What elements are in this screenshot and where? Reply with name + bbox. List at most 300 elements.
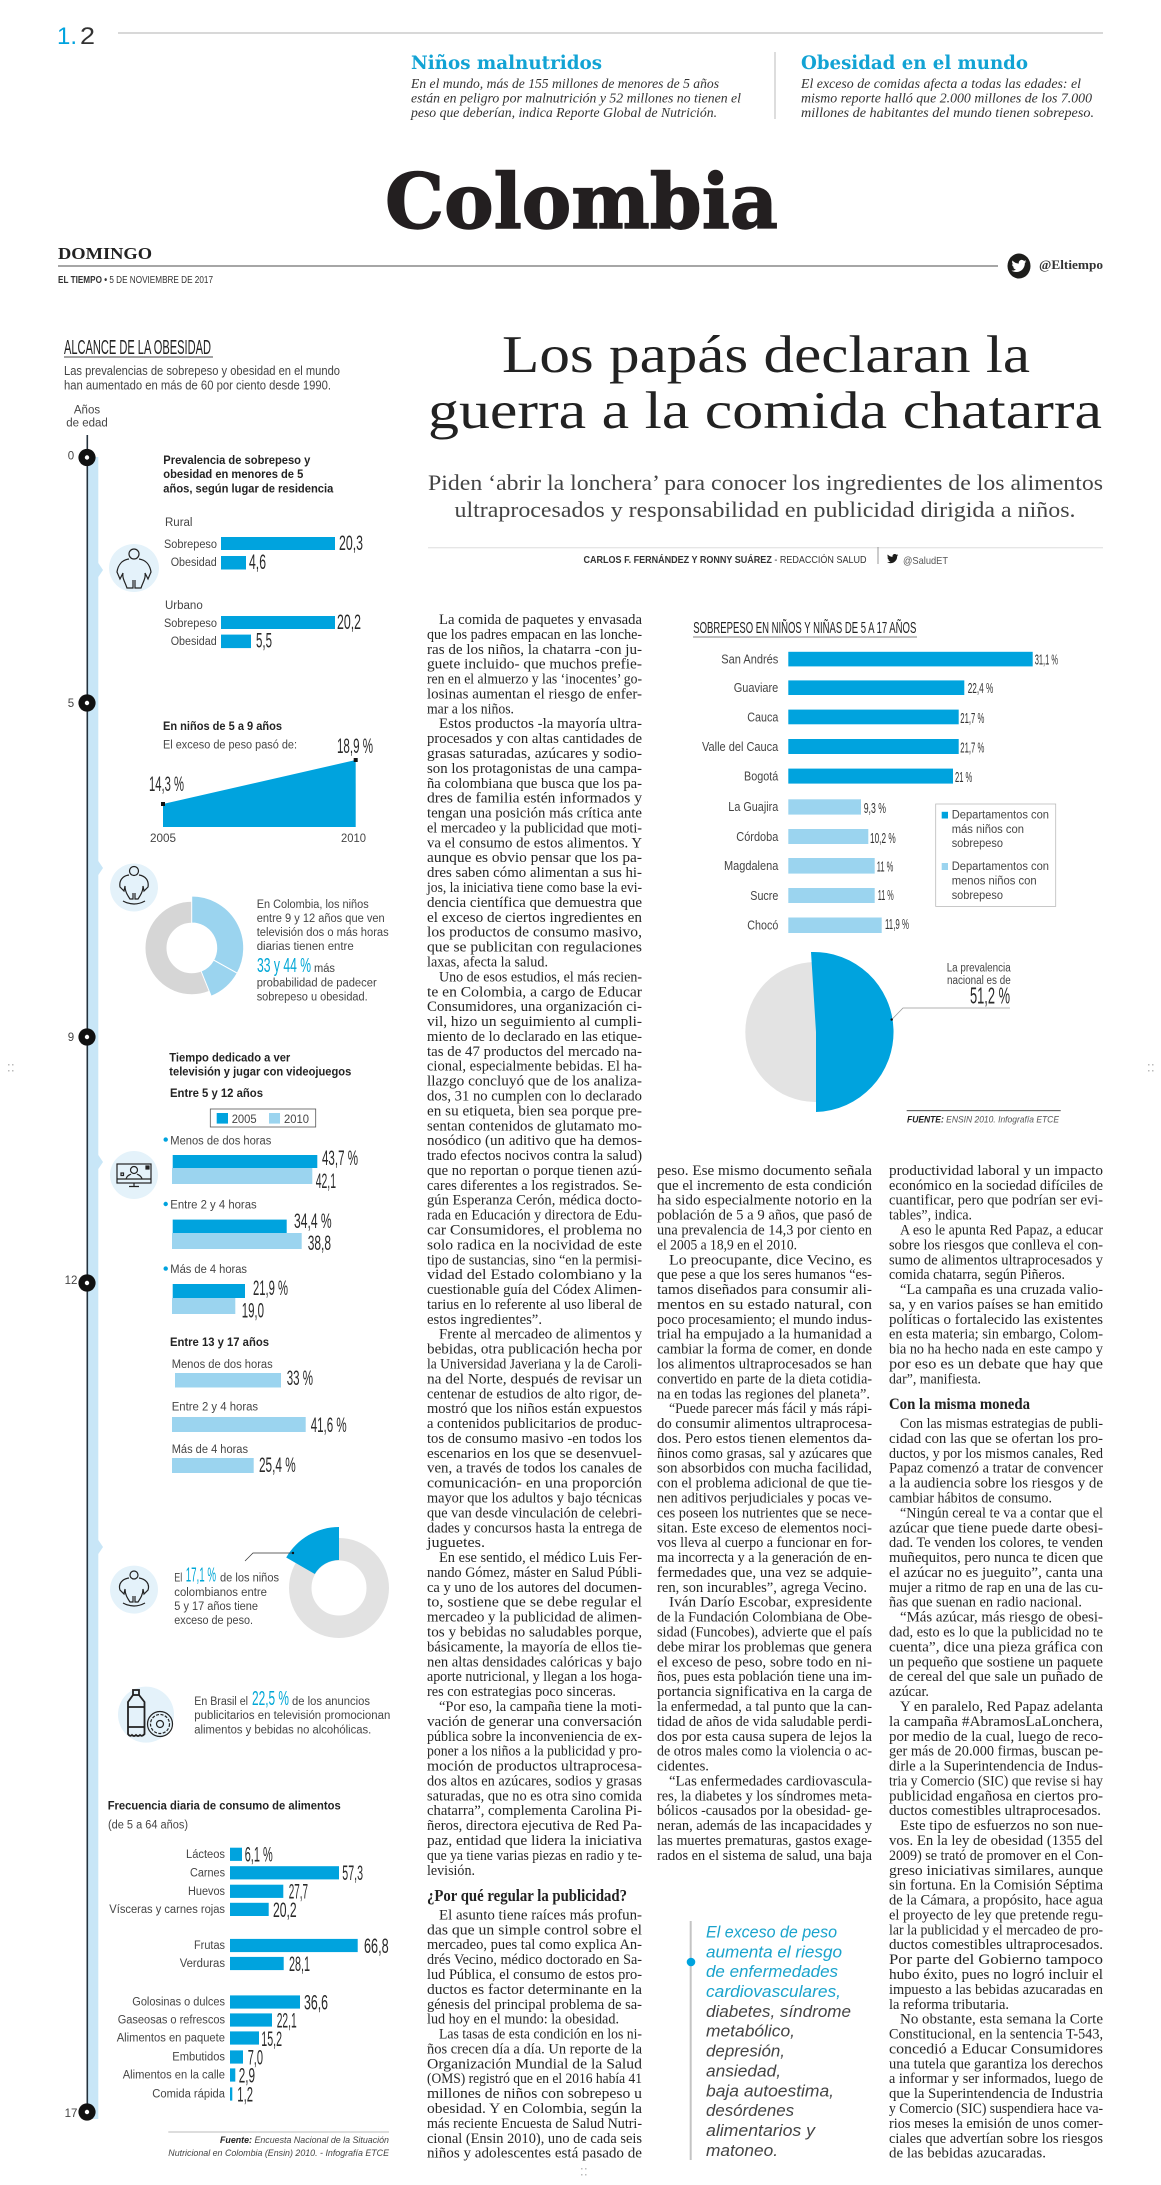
paragraph: Iván Darío Escobar: ños, pues esta población tiene una im- bbox=[657, 1669, 872, 1685]
paragraph: Luis Fernando Gómez: nando Gómez, máster en Salud Públi- bbox=[427, 1565, 642, 1581]
paragraph: estudio Educar Consumidores: te en Colombia, a cargo de Educar bbox=[427, 984, 642, 1000]
callout: exceso de peso: metabólico, bbox=[706, 2022, 795, 2041]
paragraph: Corte Constitucional: una tutela que garantiza los derechos bbox=[889, 2056, 1103, 2072]
paragraph: Carolina Piñeros: vación de generar una conversación bbox=[427, 1714, 642, 1730]
paragraph: Corte Constitucional: ciales que advertían sobre los riesgos bbox=[889, 2131, 1103, 2147]
legend: departamentos: sobrepeso bbox=[952, 890, 1003, 902]
paragraph: AbramosLaLonchera bbox=[889, 1699, 1103, 1819]
paragraph: puede parecer: con el problema adicional de que tie- bbox=[657, 1476, 872, 1492]
paragraph: más azúcar: “Más azúcar, más riesgo de obesi- bbox=[900, 1610, 1103, 1626]
paragraph: puede parecer bbox=[657, 1401, 872, 1596]
deck: Piden ‘abrir la lonchera’ para conocer los ingredientes de los alimentos bbox=[428, 470, 1103, 495]
paragraph: Luis Fernando Gómez bbox=[427, 1550, 642, 1700]
paragraph: Carolina Piñeros bbox=[427, 1699, 642, 1879]
chart: tiempo dedicado a televisión y videojuegos: 33 % bbox=[287, 1367, 313, 1390]
chart: tiempo dedicado a televisión y videojuegos: Entre 5 y 12 años bbox=[170, 1088, 263, 1100]
paragraph: enfermedades cardiovasculares: bólicos -causados por la obesidad- ge- bbox=[657, 1803, 872, 1819]
paragraph: ley de obesidad: impuesto a las bebidas azucaradas en bbox=[889, 1982, 1103, 1998]
paragraph: Iván Darío Escobar: de la Fundación Colombiana de Obe- bbox=[657, 1610, 872, 1626]
paragraph: estudio Educar Consumidores: tas de 47 productos del mercado na- bbox=[427, 1044, 642, 1060]
chart: frecuencia diaria de consumo: 22,1 bbox=[277, 2010, 297, 2032]
bar chart: departamentos: Chocó bbox=[747, 918, 778, 932]
paragraph: ningún cereal: azúcar que tiene puede darte obesi- bbox=[889, 1520, 1103, 1536]
chart: area exceso de peso 5 a 9 años bbox=[149, 721, 373, 845]
paragraph: AbramosLaLonchera: la campaña #AbramosLaLonchera, bbox=[889, 1714, 1103, 1730]
paragraph: frente al mercadeo: la Universidad Javeriana y la de Caroli- bbox=[427, 1356, 642, 1372]
paragraph: intro: ras de los niños, la chatarra -con ju- bbox=[427, 642, 642, 658]
chart: frecuencia diaria de consumo: 36,6 bbox=[304, 1992, 328, 2014]
chart: prevalencia por lugar de residencia: Sobrepeso bbox=[164, 539, 217, 551]
paragraph: estudio Educar Consumidores bbox=[427, 969, 642, 1328]
paragraph: mismas estrategias: ductos, y por los mismos canales, Red bbox=[889, 1446, 1103, 1462]
paragraph: Iván Darío Escobar: sidad (Funcobes), advierte que el país bbox=[657, 1624, 872, 1640]
paragraph: cruzada valiosa bbox=[889, 1282, 1103, 1387]
text: Brasil 22,5 %: 22,5 % bbox=[252, 1688, 289, 1710]
bar chart: departamentos: 10,2 % bbox=[870, 830, 896, 847]
paragraph: estos productos: laxas, afecta la salud. bbox=[427, 954, 548, 970]
paragraph: ley de obesidad: lar la publicidad y el mercadeo de pro- bbox=[889, 1922, 1103, 1938]
paragraph: estudio Educar Consumidores: cares diferentes a los registrados. Se- bbox=[427, 1178, 642, 1194]
paragraph: ley de obesidad: greso iniciativas similares, aunque bbox=[889, 1863, 1103, 1879]
paragraph: cruzada valiosa: por eso es un debate que hay que bbox=[889, 1356, 1103, 1372]
paragraph: ley de obesidad: hubo éxito, pues no logró incluir el bbox=[889, 1967, 1103, 1983]
paragraph: puede parecer: nen aditivos perjudiciales y pocas ve- bbox=[657, 1490, 872, 1506]
chart: frecuencia diaria de consumo: Comida rápida bbox=[152, 2089, 226, 2101]
paragraph: frente al mercadeo: Frente al mercadeo de alimentos y bbox=[439, 1327, 642, 1343]
callout: exceso de peso: aumenta el riesgo bbox=[706, 1942, 842, 1961]
source: infografía: Fuente: Encuesta Nacional de la Situación bbox=[220, 2135, 389, 2145]
text: niños que ven televisión: 33 y 44 % bbox=[257, 955, 311, 977]
paragraph: productividad bbox=[889, 1163, 1103, 1224]
chart: pie prevalencia nacional bbox=[745, 952, 1010, 1112]
byline bbox=[584, 547, 949, 567]
paragraph: mismas estrategias: Papaz comenzó a tratar de convencer bbox=[889, 1461, 1103, 1477]
chart: frecuencia diaria de consumo: 6,1 % bbox=[245, 1844, 273, 1866]
paragraph: mismas estrategias: Con las mismas estrategias de publi- bbox=[900, 1416, 1103, 1432]
bar chart: departamentos: Valle del Cauca bbox=[702, 740, 778, 754]
callout: exceso de peso: depresión, bbox=[706, 2042, 785, 2061]
chart: area exceso de peso 5 a 9 años: 2005 bbox=[150, 833, 176, 845]
paragraph: AbramosLaLonchera: por medio de la cual, luego de reco- bbox=[889, 1729, 1103, 1745]
chart: prevalencia por lugar de residencia: 20,2 bbox=[337, 611, 361, 634]
paragraph: estos productos bbox=[426, 716, 643, 970]
text: niños que ven televisión bbox=[257, 899, 389, 1004]
subheading: por qué regular: ¿Por qué regular la publicidad? bbox=[427, 1886, 627, 1905]
paragraph: Luis Fernando Gómez: aporte nutricional, y llegan a los hoga- bbox=[427, 1669, 642, 1685]
paragraph: lo preocupante bbox=[657, 1252, 873, 1402]
paragraph: tasas: ños crecen día a día. Un reporte de la bbox=[427, 2041, 642, 2057]
callout: exceso de peso: de enfermedades bbox=[706, 1962, 838, 1981]
chart: tiempo dedicado a televisión y videojuegos: 41,6 % bbox=[311, 1414, 347, 1437]
byline: @SaludET bbox=[903, 555, 949, 567]
paragraph: estudio Educar Consumidores: llazgo concluyó que de los analiza- bbox=[427, 1074, 642, 1090]
paragraph: ningún cereal: ñas que suenan en radio nacional. bbox=[889, 1595, 1082, 1611]
paragraph: frente al mercadeo: dades y concursos hasta la entrega de bbox=[427, 1520, 642, 1536]
dateline: EL TIEMPO • 5 DE NOVIEMBRE DE 2017 bbox=[58, 275, 213, 286]
chart: prevalencia por lugar de residencia: Prevalencia de sobrepeso y bbox=[163, 455, 311, 467]
paragraph: Red Papaz: sobre los riesgos que conlleva el con- bbox=[889, 1237, 1103, 1253]
teaser: Niños malnutridos: están en peligro por malnutrición y 52 millones no tienen el bbox=[411, 90, 741, 106]
paragraph: tasas: más reciente Encuesta de Salud Nutri- bbox=[427, 2116, 642, 2132]
chart: frecuencia diaria de consumo: 20,2 bbox=[273, 1899, 297, 1922]
headline: guerra a la comida chatarra bbox=[428, 382, 1102, 440]
text: niños que ven televisión: más bbox=[314, 963, 335, 975]
chart: frecuencia diaria de consumo: 66,8 bbox=[364, 1935, 389, 1958]
legend: departamentos bbox=[936, 804, 1056, 906]
chart: frecuencia diaria de consumo: Embutidos bbox=[172, 2052, 225, 2064]
text: prevalencia nacional: nacional es de bbox=[947, 975, 1011, 987]
paragraph: más azúcar bbox=[889, 1610, 1104, 1700]
chart: area exceso de peso 5 a 9 años: En niños de 5 a 9 años bbox=[163, 721, 282, 733]
paragraph: Carolina Piñeros: ñeros, directora ejecutiva de Red Pa- bbox=[427, 1818, 642, 1834]
chart: frecuencia diaria de consumo: 15,2 bbox=[261, 2028, 282, 2051]
paragraph: lo preocupante: trial ha empujado a la humanidad a bbox=[657, 1327, 872, 1343]
paragraph: más azúcar: de cereal del que sale un puñado de bbox=[889, 1669, 1103, 1685]
bar chart: departamentos: La Guajira bbox=[728, 800, 778, 814]
text: Brasil 22,5 % bbox=[194, 1688, 390, 1737]
paragraph: Andrés Vecino: das que un simple control sobre el bbox=[427, 1922, 642, 1938]
text: niños que ven televisión: probabilidad de padecer bbox=[257, 977, 377, 989]
twitter handle: @Eltiempo bbox=[1039, 257, 1103, 272]
timeline: 0 bbox=[68, 450, 74, 462]
paragraph: Luis Fernando Gómez: básicamente, la mayoría de ellos tie- bbox=[427, 1639, 642, 1655]
paragraph: enfermedades cardiovasculares: res, la diabetes y los síndromes meta- bbox=[657, 1788, 872, 1804]
icon: bottle and doughnut bbox=[118, 1687, 174, 1743]
paragraph: Carolina Piñeros: pública sobre la inconveniencia de ex- bbox=[427, 1729, 642, 1745]
chart: area exceso de peso 5 a 9 años: El exceso de peso pasó de: bbox=[163, 740, 297, 752]
paragraph: Carolina Piñeros: que ya tiene varias piezas en radio y te- bbox=[427, 1848, 642, 1864]
article column 2 bbox=[657, 1163, 873, 1864]
page number: 1. bbox=[57, 23, 77, 50]
paragraph: Iván Darío Escobar: la enfermedad, a tal punto que la can- bbox=[657, 1699, 872, 1715]
panel intro bbox=[64, 364, 340, 393]
chart: frecuencia diaria de consumo: Lácteos bbox=[186, 1849, 225, 1861]
bar chart: departamentos: 11 % bbox=[878, 887, 894, 904]
paragraph: Luis Fernando Gómez: En ese sentido, el médico Luis Fer- bbox=[439, 1550, 642, 1566]
callout: exceso de peso: cardiovasculares, bbox=[706, 1982, 841, 2001]
paragraph: cruzada valiosa: bia no ha hecho nada en este campo y bbox=[889, 1342, 1103, 1358]
paragraph: AbramosLaLonchera: tria y Comercio (SIC) que revise si hay bbox=[889, 1773, 1103, 1789]
paragraph: Corte Constitucional: a informar y ser informados, luego de bbox=[889, 2071, 1103, 2087]
paragraph: estos productos: procesados y con altas cantidades de bbox=[427, 731, 642, 747]
paragraph: tasas: Organización Mundial de la Salud bbox=[427, 2056, 643, 2072]
paragraph: Andrés Vecino: lud hoy en el mundo: la obesidad. bbox=[427, 2012, 619, 2028]
chart: prevalencia por lugar de residencia: Rural bbox=[165, 517, 192, 529]
paragraph: estos productos: dres saben cómo alimentan a sus hi- bbox=[427, 865, 642, 881]
paragraph: tasas: cional (Ensin 2010), uno de cada seis bbox=[427, 2131, 642, 2147]
chart: frecuencia diaria de consumo bbox=[108, 1801, 389, 2106]
deck: ultraprocesados y responsabilidad en publicidad dirigida a niños. bbox=[454, 497, 1076, 522]
paragraph: estudio Educar Consumidores: nosódico (un aditivo que ha demos- bbox=[427, 1133, 642, 1149]
chart: tiempo dedicado a televisión y videojuegos: 42,1 bbox=[316, 1170, 336, 1193]
paragraph: puede parecer: ñinos como grasas, sal y azúcares que bbox=[657, 1446, 872, 1462]
paragraph: puede parecer: fermedades que, una vez se adquie- bbox=[657, 1565, 872, 1581]
paragraph: tasas: millones de niños con sobrepeso u bbox=[427, 2086, 643, 2102]
paragraph: AbramosLaLonchera: dirle a la Superintendencia de Indus- bbox=[889, 1758, 1103, 1774]
icon: child with excess weight bbox=[109, 544, 159, 592]
paragraph: intro bbox=[427, 612, 642, 717]
paragraph: Andrés Vecino: mercadeo, pues tal como explica An- bbox=[427, 1937, 642, 1953]
paragraph: frente al mercadeo: na del Norte, después de revisar un bbox=[427, 1371, 642, 1387]
chart: tiempo dedicado a televisión y videojuegos: Más de 4 horas bbox=[172, 1444, 248, 1456]
panel: sobrepeso por departamento bbox=[693, 617, 1061, 1126]
paragraph: Corte Constitucional: concedió a Educar Consumidores bbox=[889, 2041, 1103, 2057]
paragraph: lo preocupante: los alimentos ultraprocesados se han bbox=[657, 1356, 872, 1372]
chart: tiempo dedicado a televisión y videojuegos: 43,7 % bbox=[322, 1147, 358, 1170]
paragraph: frente al mercadeo: a contenidos publicitarios de produc- bbox=[427, 1416, 642, 1432]
paragraph: intro: guete incluido- que muchos prefie- bbox=[427, 657, 642, 673]
text: prevalencia nacional: La prevalencia bbox=[947, 962, 1011, 974]
chart: prevalencia por lugar de residencia: años, según lugar de residencia bbox=[163, 484, 334, 496]
paragraph: Corte Constitucional bbox=[889, 2012, 1103, 2162]
paragraph: Carolina Piñeros: levisión. bbox=[427, 1863, 475, 1879]
paragraph: estudio Educar Consumidores: miento de lo declarado en las etique- bbox=[427, 1029, 642, 1045]
text: niños que ven televisión: televisión dos o más horas bbox=[257, 927, 389, 939]
paragraph: AbramosLaLonchera: ductos comestibles ultraprocesados. bbox=[889, 1803, 1101, 1819]
paragraph: estos productos: los productos de consumo masivo, bbox=[427, 925, 642, 941]
paragraph: más azúcar: azúcar. bbox=[889, 1684, 929, 1700]
paragraph: Luis Fernando Gómez: to, sostiene que se debe regular el bbox=[427, 1595, 642, 1611]
paragraph: puede parecer: dos. Pero estos tienen elementos da- bbox=[657, 1431, 872, 1447]
paragraph: ley de obesidad: la reforma tributaria. bbox=[889, 1997, 1009, 2013]
paragraph: Corte Constitucional: de las bebidas azucaradas. bbox=[889, 2146, 1046, 2162]
paragraph: Carolina Piñeros: dos altos en azúcares, sodios y grasas bbox=[427, 1773, 642, 1789]
masthead: Colombia: Colombia bbox=[385, 157, 778, 246]
paragraph: Carolina Piñeros: poner a los niños a la publicidad y pro- bbox=[427, 1744, 642, 1760]
chart: frecuencia diaria de consumo: 27,7 bbox=[289, 1880, 308, 1904]
paragraph: enfermedades cardiovasculares: neran, además de las incapacidades y bbox=[657, 1818, 872, 1834]
paragraph: frente al mercadeo: centenar de estudios de alto rigor, de- bbox=[427, 1386, 642, 1402]
paragraph: enfermedades cardiovasculares: “Las enfermedades cardiovascula- bbox=[669, 1773, 872, 1789]
panel: sobrepeso por departamento: 31,1 % bbox=[1035, 651, 1058, 668]
paragraph: Carolina Piñeros: saturadas, que no es otra sino comida bbox=[427, 1788, 642, 1804]
paragraph: frente al mercadeo: que van desde vinculación de celebri- bbox=[427, 1505, 642, 1521]
bar chart: departamentos: Cauca bbox=[747, 710, 778, 724]
paragraph: Iván Darío Escobar: de otros males como la violencia o ac- bbox=[657, 1744, 872, 1760]
chart: frecuencia diaria de consumo: Frecuencia diaria de consumo de alimentos bbox=[108, 1801, 341, 1813]
chart: prevalencia por lugar de residencia: Sobrepeso bbox=[164, 618, 217, 630]
chart: prevalencia por lugar de residencia: obesidad en menores de 5 bbox=[163, 469, 304, 481]
paragraph: ningún cereal: mujer a ritmo de rap en una de las cu- bbox=[889, 1580, 1103, 1596]
teaser: Niños malnutridos: Niños malnutridos bbox=[411, 52, 602, 74]
paragraph: productividad: productividad laboral y un impacto bbox=[889, 1163, 1103, 1179]
chart: tiempo dedicado a televisión y videojuegos: 38,8 bbox=[308, 1232, 331, 1255]
paragraph: intro: losinas aumentan el riesgo de enfer- bbox=[427, 686, 642, 702]
paragraph: Red Papaz bbox=[889, 1222, 1103, 1283]
paragraph: más azúcar: un pequeño que sostiene un paquete bbox=[889, 1654, 1103, 1670]
timeline: 5 bbox=[68, 698, 74, 710]
paragraph: estos productos: jos, la iniciativa tiene como base la evi- bbox=[426, 880, 642, 896]
timeline: 9 bbox=[68, 1032, 74, 1044]
legend: departamentos: más niños con bbox=[952, 824, 1024, 836]
chart: frecuencia diaria de consumo: (de 5 a 64 años) bbox=[108, 1820, 188, 1832]
bar chart: departamentos: 21 % bbox=[955, 769, 972, 786]
chart: frecuencia diaria de consumo: Huevos bbox=[188, 1886, 225, 1898]
chart: tiempo dedicado a televisión y videojuegos: Más de 4 horas bbox=[170, 1264, 247, 1276]
paragraph: ese mismo documento bbox=[657, 1163, 872, 1253]
paragraph: lo preocupante: Lo preocupante, dice Vecino, es bbox=[669, 1252, 872, 1268]
callout: exceso de peso: diabetes, síndrome bbox=[706, 2002, 851, 2021]
paragraph: Andrés Vecino: El asunto tiene raíces más profun- bbox=[439, 1907, 642, 1923]
page number: 2 bbox=[80, 23, 95, 50]
bar chart: departamentos bbox=[702, 651, 1058, 933]
paragraph: AbramosLaLonchera: ger más de 20.000 firmas, buscan pe- bbox=[889, 1744, 1103, 1760]
paragraph: Andrés Vecino: drés Vecino, médico doctorado en Sa- bbox=[427, 1952, 642, 1968]
paragraph: ningún cereal: “Ningún cereal te va a contar que el bbox=[900, 1505, 1103, 1521]
teaser: Niños malnutridos bbox=[410, 52, 741, 120]
paragraph: puede parecer: ren, son incurables”, agrega Vecino. bbox=[657, 1580, 867, 1596]
paragraph: frente al mercadeo: mostró que los niños están expuestos bbox=[427, 1401, 642, 1417]
chart: donut televisión 33 y 44 % bbox=[156, 896, 244, 996]
chart: tiempo dedicado a televisión y videojuegos: Entre 2 y 4 horas bbox=[172, 1402, 258, 1414]
paragraph: estudio Educar Consumidores: vil, hizo un seguimiento al cumpli- bbox=[427, 1014, 642, 1030]
callout: exceso de peso: alimentarios y bbox=[706, 2121, 817, 2140]
text: 17,1 % de los niños: El bbox=[174, 1573, 182, 1585]
paragraph: frente al mercadeo: mayor que los adultos y bajo técnicas bbox=[427, 1490, 642, 1506]
teaser: Obesidad en el mundo: El exceso de comidas afecta a todas las edades: el bbox=[800, 76, 1081, 91]
legend: departamentos: Departamentos con bbox=[952, 861, 1049, 873]
paragraph: ese mismo documento: el 2005 a 18,9 en el 2010. bbox=[657, 1237, 797, 1253]
bar chart: departamentos: 22,4 % bbox=[968, 680, 993, 697]
paragraph: cruzada valiosa: políticas o fortalecido las existentes bbox=[889, 1312, 1103, 1328]
paragraph: frente al mercadeo bbox=[426, 1327, 643, 1551]
chart: tiempo dedicado a televisión y videojuegos: Entre 2 y 4 horas bbox=[170, 1200, 257, 1212]
text: Brasil 22,5 %: publicitarios en televisión promocionan bbox=[194, 1710, 390, 1722]
paragraph: Corte Constitucional: que la Superintendencia de Industria bbox=[889, 2086, 1103, 2102]
chart: tiempo dedicado a televisión y videojuegos: Tiempo dedicado a ver bbox=[169, 1052, 291, 1064]
callout: exceso de peso: El exceso de peso bbox=[706, 1922, 837, 1942]
paragraph: ley de obesidad: 2009) se trató de promover en el Con- bbox=[889, 1848, 1103, 1864]
page number bbox=[57, 23, 95, 50]
chart: tiempo dedicado a televisión y videojuegos: Entre 13 y 17 años bbox=[170, 1337, 269, 1349]
paragraph: mismas estrategias: cidad con las que se ofertan los pro- bbox=[889, 1431, 1103, 1447]
paragraph: Luis Fernando Gómez: res con estrategias poco sinceras. bbox=[427, 1684, 616, 1700]
chart: frecuencia diaria de consumo: Carnes bbox=[190, 1867, 225, 1879]
paragraph: frente al mercadeo: bebidas, otra publicación hecha por bbox=[427, 1342, 642, 1358]
paragraph: Iván Darío Escobar: dos por esta causa supera de lejos la bbox=[657, 1729, 872, 1745]
paragraph: estudio Educar Consumidores: sentan contenidos de glutamato mo- bbox=[427, 1118, 642, 1134]
paragraph: ningún cereal bbox=[889, 1505, 1103, 1611]
bar chart: departamentos: 9,3 % bbox=[864, 800, 886, 817]
text: niños que ven televisión: En Colombia, los niños bbox=[257, 899, 369, 911]
byline: CARLOS F. FERNÁNDEZ Y RONNY SUÁREZ - REDACCIÓN SALUD bbox=[584, 553, 867, 566]
chart: frecuencia diaria de consumo: Alimentos en la calle bbox=[123, 2070, 225, 2082]
paragraph: tasas: Las tasas de esta condición en los ni- bbox=[439, 2027, 642, 2043]
chart: frecuencia diaria de consumo: Golosinas o dulces bbox=[132, 1997, 225, 2009]
chart: area exceso de peso 5 a 9 años: 18,9 % bbox=[337, 735, 373, 758]
paragraph: frente al mercadeo: comunicación- en una proporción bbox=[427, 1476, 643, 1492]
bar chart: departamentos: 21,7 % bbox=[960, 710, 984, 727]
callout: exceso de peso: baja autoestima, bbox=[706, 2081, 834, 2100]
paragraph: Luis Fernando Gómez: ca y uno de los autores del documen- bbox=[427, 1580, 642, 1596]
paragraph: ley de obesidad: el proyecto de ley que pretende regu- bbox=[889, 1907, 1103, 1923]
paragraph: Corte Constitucional: y Comercio (SIC) suspendiera hace va- bbox=[889, 2101, 1103, 2117]
paragraph: más azúcar: cuenta”, dice una pieza gráfica con bbox=[889, 1639, 1104, 1655]
paragraph: estudio Educar Consumidores: estos ingredientes”. bbox=[427, 1312, 542, 1328]
paragraph: frente al mercadeo: tos de consumo masivo -en todos los bbox=[427, 1431, 642, 1447]
paragraph: estos productos: va el consumo de estos alimentos. Y bbox=[427, 835, 642, 851]
chart: tiempo dedicado a televisión y videojuegos: 25,4 % bbox=[259, 1454, 296, 1477]
source: ENSIN: FUENTE: ENSIN 2010. Infografía ETCE bbox=[907, 1114, 1060, 1126]
paragraph: Luis Fernando Gómez: tos y bebidas no saludables porque, bbox=[427, 1624, 642, 1640]
callout: exceso de peso: desórdenes bbox=[706, 2101, 794, 2120]
headline bbox=[428, 326, 1102, 440]
chart: frecuencia diaria de consumo: Verduras bbox=[180, 1958, 225, 1970]
paragraph: ley de obesidad: ductos comestibles ultraprocesados. bbox=[889, 1937, 1103, 1953]
paragraph: Carolina Piñeros: “Por eso, la campaña tiene la moti- bbox=[439, 1699, 642, 1715]
paragraph: tasas bbox=[427, 2027, 643, 2162]
paragraph: Iván Darío Escobar: cidentes. bbox=[657, 1758, 709, 1774]
paragraph: mismas estrategias: a la audiencia sobre los riesgos y de bbox=[889, 1476, 1103, 1492]
paragraph: intro: ren en el almuerzo y las ‘inocentes’ go- bbox=[427, 672, 642, 688]
legend: departamentos: Departamentos con bbox=[952, 810, 1049, 822]
paragraph: cruzada valiosa: “La campaña es una cruzada valio- bbox=[900, 1282, 1103, 1298]
paragraph: ese mismo documento: que el incremento de esta condición bbox=[657, 1178, 872, 1194]
chart: prevalencia por lugar de residencia: 20,3 bbox=[339, 532, 363, 555]
headline: Los papás declaran la bbox=[502, 326, 1030, 384]
paragraph: Iván Darío Escobar bbox=[657, 1595, 872, 1774]
paragraph: Carolina Piñeros: paz, entidad que lidera la iniciativa bbox=[427, 1833, 642, 1849]
paragraph: estudio Educar Consumidores: cional, especialmente bebidas. El ha- bbox=[427, 1059, 642, 1075]
paragraph: puede parecer: ma incorrecta y a la generación de en- bbox=[657, 1550, 872, 1566]
paragraph: estudio Educar Consumidores: gún Esperanza Cerón, médica docto- bbox=[427, 1193, 642, 1209]
paragraph: Red Papaz: comida chatarra, según Piñeros. bbox=[889, 1267, 1065, 1283]
chart: area exceso de peso 5 a 9 años: 2010 bbox=[341, 833, 366, 845]
chart: tiempo dedicado a televisión y videojuegos: 19,0 bbox=[242, 1300, 264, 1322]
chart: frecuencia diaria de consumo: Vísceras y carnes rojas bbox=[109, 1904, 225, 1916]
paragraph: estos productos: que se publicitan con regulaciones bbox=[427, 940, 642, 956]
paragraph: tasas: obesidad. Y en Colombia, según la bbox=[427, 2101, 642, 2117]
chart: prevalencia por lugar de residencia: Urbano bbox=[165, 600, 203, 612]
paragraph: ningún cereal: muñequitos, pero nunca te dicen que bbox=[889, 1550, 1103, 1566]
timeline: de edad bbox=[66, 417, 108, 429]
paragraph: frente al mercadeo: juguetes. bbox=[426, 1535, 485, 1551]
chart heading: SOBREPESO EN NIÑOS Y NIÑAS DE 5 A 17 AÑOS bbox=[693, 617, 916, 637]
teaser: Obesidad en el mundo: millones de habitantes del mundo tienen sobrepeso. bbox=[801, 105, 1094, 120]
chart: prevalencia por lugar de residencia: Obesidad bbox=[171, 636, 217, 648]
paragraph: estudio Educar Consumidores: trado efectos nocivos contra la salud) bbox=[427, 1148, 642, 1164]
bar chart: departamentos: Córdoba bbox=[736, 830, 778, 844]
panel intro: Las prevalencias de sobrepeso y obesidad en el mundo bbox=[64, 364, 340, 378]
icon: television bbox=[110, 1151, 158, 1199]
paragraph: estos productos: el mercadeo y la publicidad que moti- bbox=[427, 820, 642, 836]
legend: años: 2005 bbox=[232, 1114, 257, 1126]
legend: departamentos: sobrepeso bbox=[952, 838, 1003, 850]
paragraph: lo preocupante: tamos diseñados para consumir ali- bbox=[657, 1282, 872, 1298]
paragraph: ese mismo documento: peso. Ese mismo documento señala bbox=[657, 1163, 872, 1179]
paragraph: cruzada valiosa: en esta materia; sin embargo, Colom- bbox=[889, 1327, 1103, 1343]
legend: años bbox=[210, 1109, 316, 1127]
text: Brasil 22,5 %: En Brasil el bbox=[194, 1696, 248, 1708]
paragraph: ningún cereal: dad. Te venden los colores, te venden bbox=[889, 1535, 1103, 1551]
paragraph: puede parecer: ces poseen los nutrientes que se nece- bbox=[657, 1505, 872, 1521]
paragraph: tasas: niños y adolescentes está pasado de bbox=[427, 2146, 642, 2162]
chart: frecuencia diaria de consumo: 1,2 bbox=[237, 2084, 253, 2106]
callout: exceso de peso: ansiedad, bbox=[706, 2061, 781, 2080]
paragraph: Red Papaz: A eso le apunta Red Papaz, a educar bbox=[900, 1222, 1103, 1238]
paragraph: ley de obesidad: Este tipo de esfuerzos no son nue- bbox=[900, 1818, 1103, 1834]
paragraph: estos productos: ña colombiana que busca que los pa- bbox=[427, 776, 642, 792]
chart: prevalencia por lugar de residencia bbox=[163, 455, 363, 652]
legend: años: 2010 bbox=[284, 1114, 309, 1126]
chart: prevalencia por lugar de residencia: 4,6 bbox=[249, 551, 266, 574]
chart: tiempo dedicado a televisión y videojuegos: 34,4 % bbox=[294, 1210, 332, 1233]
paragraph: Andrés Vecino: ductos es factor determinante en la bbox=[427, 1982, 642, 1998]
timeline: 17 bbox=[65, 2108, 77, 2120]
text: 17,1 % de los niños: colombianos entre bbox=[174, 1587, 267, 1599]
bar chart: departamentos: Sucre bbox=[750, 889, 778, 903]
paragraph: productividad: cuantificar, pero que podrían ser evi- bbox=[889, 1193, 1103, 1209]
